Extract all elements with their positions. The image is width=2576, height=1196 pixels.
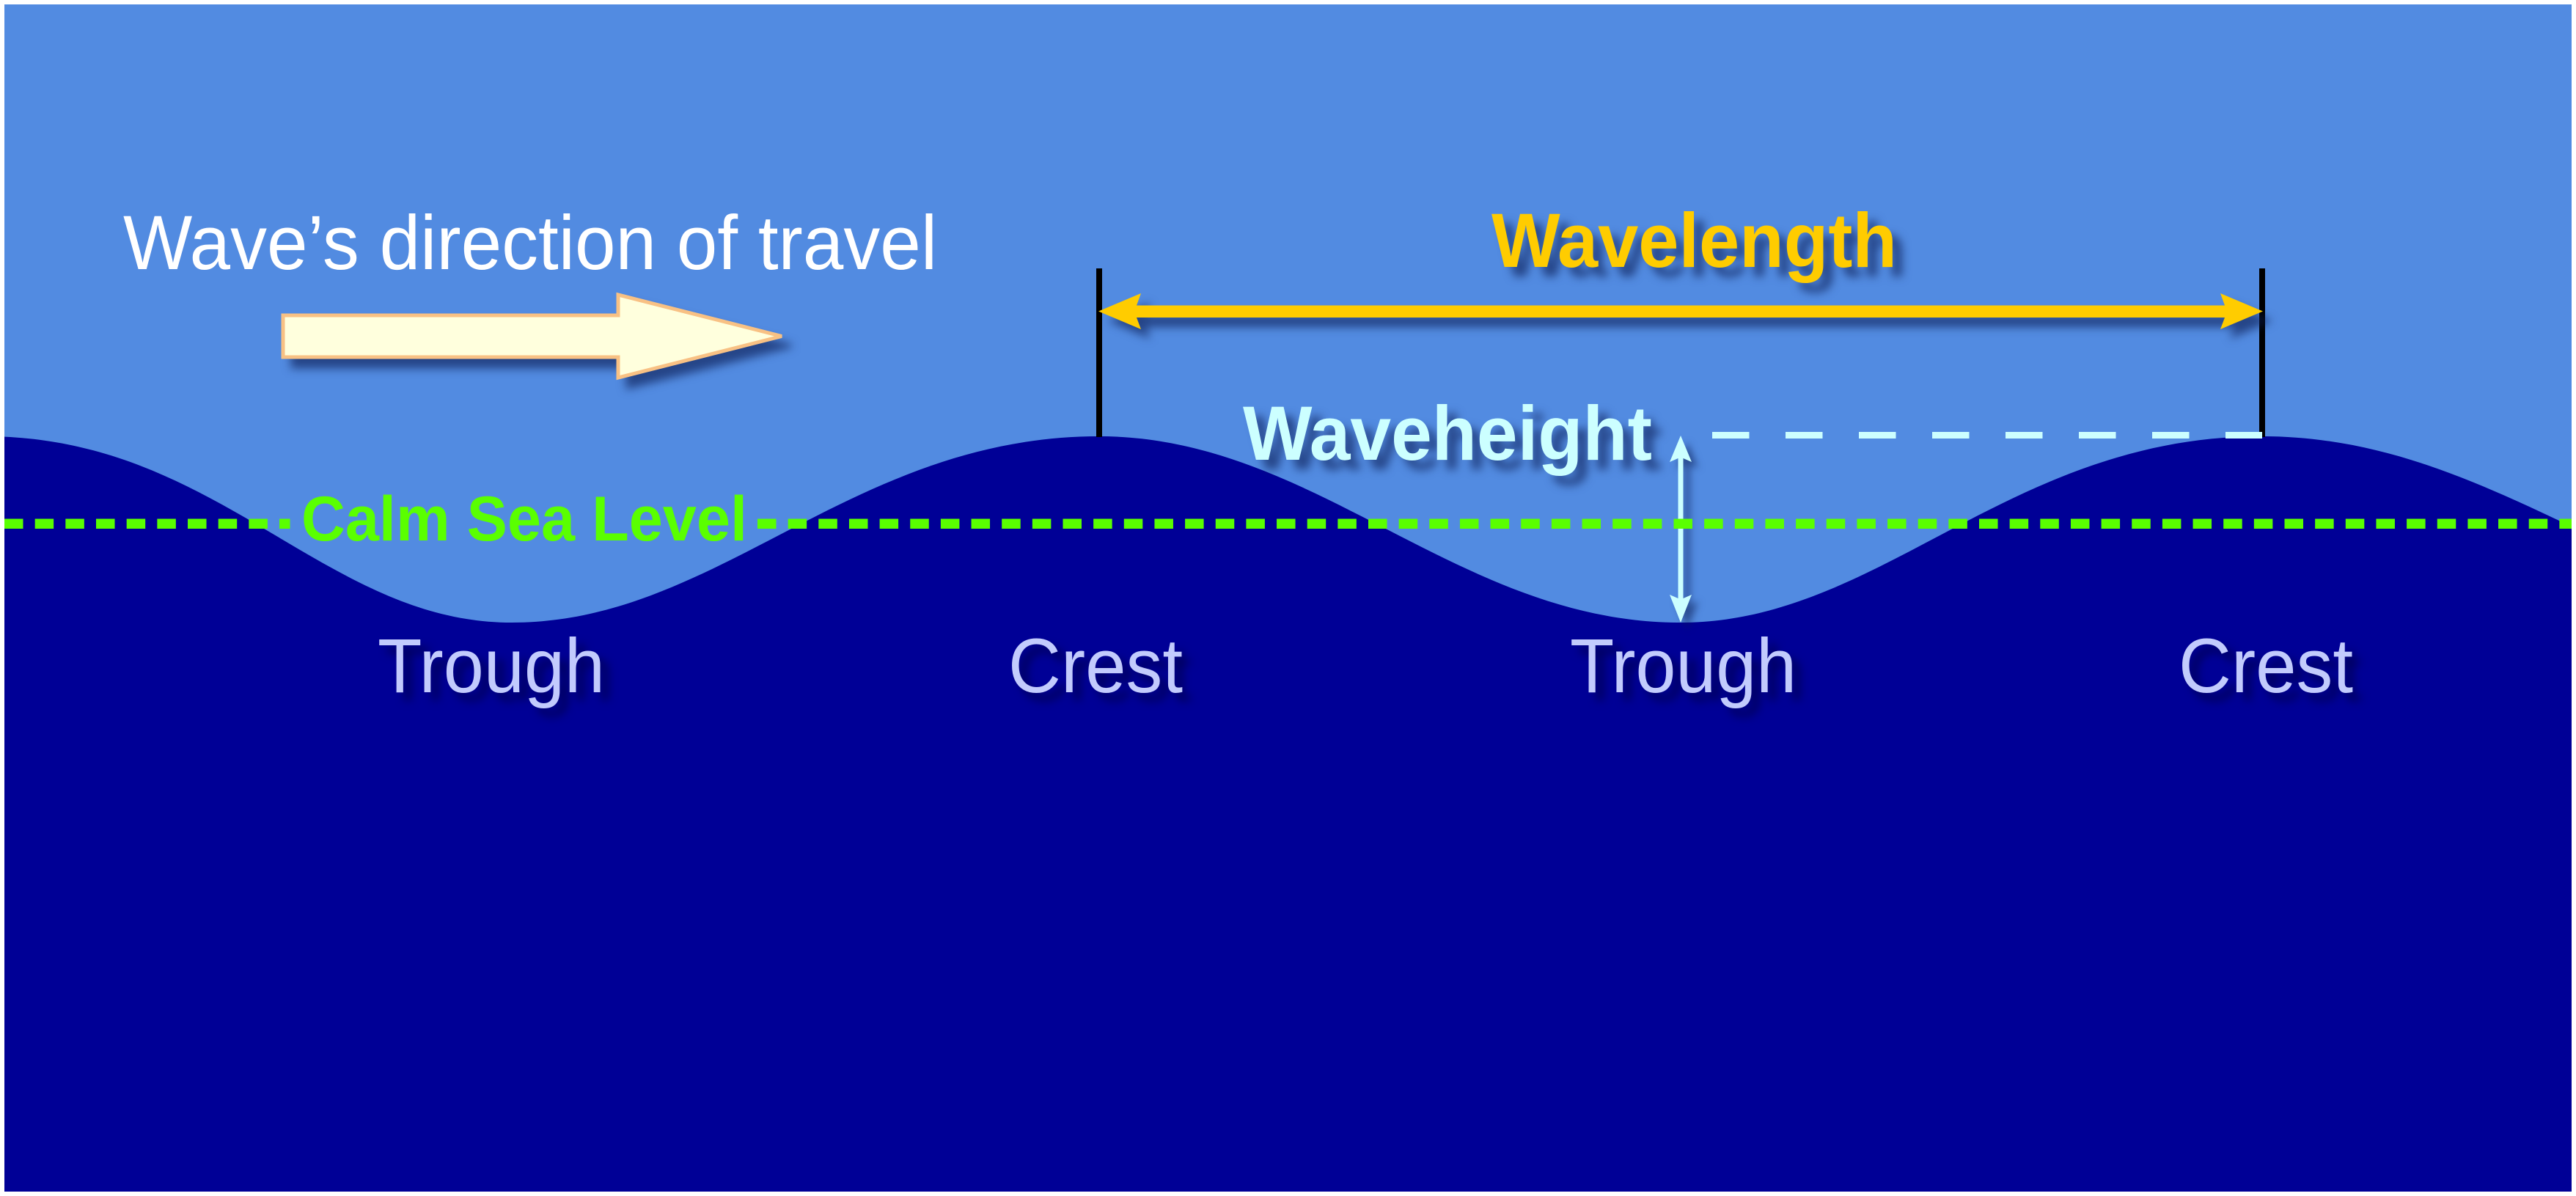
waveheight label: Waveheight xyxy=(1243,391,1652,477)
label: second crest: Crest xyxy=(2179,623,2353,709)
direction of travel label: Wave’s direction of travel xyxy=(123,200,937,286)
calm sea level dotted line xyxy=(4,519,2572,529)
label: second trough: Trough xyxy=(1570,623,1797,709)
arrow: wave direction xyxy=(283,295,782,378)
label: first crest: Crest xyxy=(1008,623,1183,709)
arrow: wavelength span xyxy=(1098,293,2263,329)
right crest marker line xyxy=(2259,268,2265,437)
arrow: waveheight span xyxy=(1670,436,1692,623)
left crest marker line xyxy=(1096,268,1102,437)
wavelength label: Wavelength xyxy=(1491,198,1897,284)
waveheight reference dashed line xyxy=(1712,432,2262,439)
calm sea level label: Calm Sea Level xyxy=(301,484,747,554)
label: first trough: Trough xyxy=(378,623,605,709)
sea body with wave surface xyxy=(0,436,2576,1195)
